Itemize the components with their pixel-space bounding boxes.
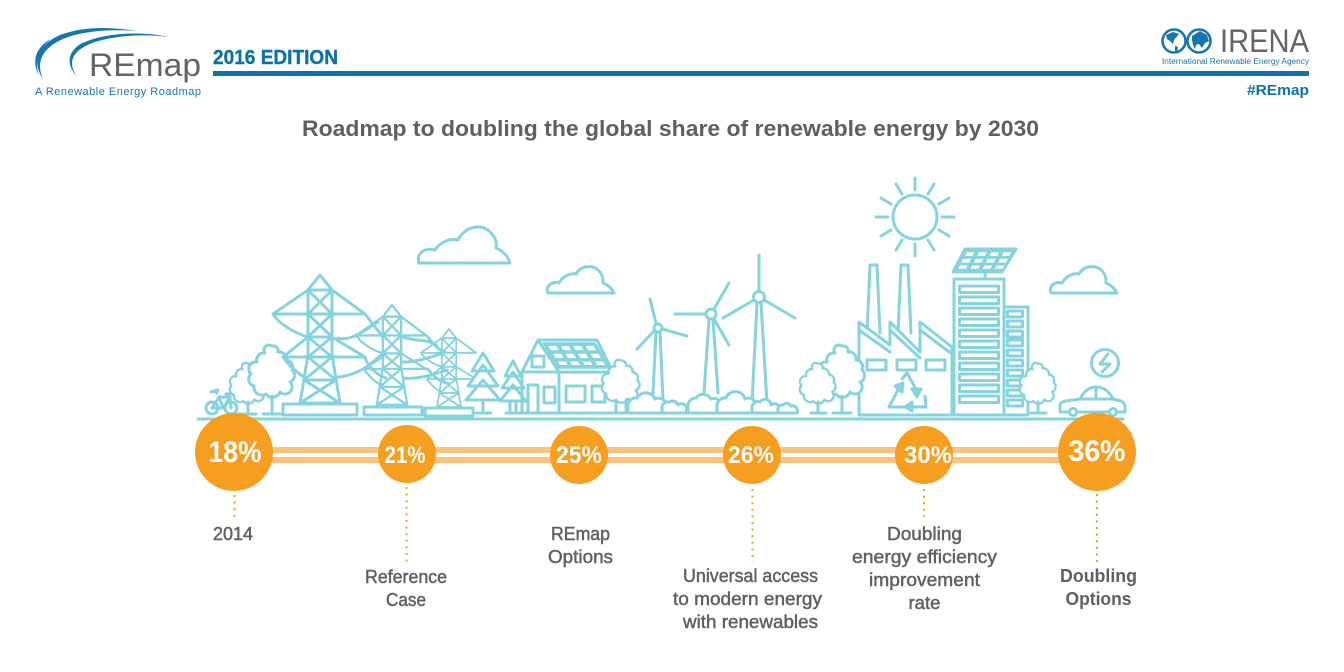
milestone: 25% REmap Options bbox=[548, 426, 613, 567]
icon: recycling triangle bbox=[889, 373, 926, 411]
milestone: 25% REmap Options: 25% bbox=[556, 442, 602, 469]
electric car bbox=[1060, 387, 1125, 416]
cloud: right bbox=[1050, 267, 1117, 293]
pine tree: first bbox=[466, 353, 500, 413]
icon: sun bbox=[876, 178, 954, 256]
icon: globe infinity bbox=[1162, 30, 1210, 53]
wind turbine: medium bbox=[675, 283, 729, 393]
milestone: 25% REmap Options: REmap bbox=[551, 524, 610, 544]
cloud: over house bbox=[547, 267, 614, 293]
header rule bbox=[213, 71, 1309, 76]
header: REmap logo bbox=[35, 28, 201, 98]
milestone: 26% Universal access bbox=[673, 426, 822, 632]
logo tagline: A Renewable Energy Roadmap bbox=[35, 86, 201, 98]
milestone: 26% Universal access: with renewables bbox=[682, 612, 818, 632]
milestone: 36% Doubling Options bbox=[1058, 413, 1137, 609]
timeline bbox=[195, 413, 1137, 632]
IRENA tagline: International Renewable Energy Agency bbox=[1162, 57, 1309, 66]
logo swoosh bbox=[35, 28, 169, 79]
power lines bbox=[338, 314, 449, 384]
wind turbine: large bbox=[723, 255, 795, 403]
title: Roadmap to doubling the global share of renewable energy by 2030 bbox=[302, 116, 1039, 141]
office towers with roof solar panel bbox=[953, 249, 1028, 415]
milestone: 30% Doubling energy efficiency: energy efficiency bbox=[852, 547, 997, 567]
wind turbine: small bbox=[637, 299, 687, 400]
bushes bbox=[628, 392, 798, 413]
milestone: 26% Universal access: Universal access bbox=[683, 566, 818, 586]
chimneys bbox=[867, 265, 911, 333]
IRENA wordmark: IRENA bbox=[1220, 23, 1310, 59]
ground line bbox=[198, 418, 1123, 420]
window rows bbox=[960, 286, 1022, 406]
edition heading: 2016 EDITION bbox=[213, 47, 338, 69]
cloud: large bbox=[418, 227, 510, 263]
trees: left pair bbox=[230, 345, 295, 414]
factory bbox=[859, 265, 952, 415]
transmission tower: large bbox=[273, 275, 365, 415]
transmission tower: small bbox=[421, 329, 476, 416]
milestone: 18% 2014: 18% bbox=[208, 436, 262, 469]
solar panel on roof bbox=[543, 343, 610, 368]
milestone: 26% Universal access: 26% bbox=[728, 442, 774, 469]
tree: by house bbox=[602, 360, 640, 413]
milestone: 30% Doubling energy efficiency: 30% bbox=[904, 442, 952, 469]
timeline double line bbox=[234, 447, 1097, 463]
milestone: 36% Doubling Options: Doubling bbox=[1060, 566, 1137, 586]
header: IRENA logo bbox=[1162, 23, 1310, 66]
milestone: 21% Reference Case: 21% bbox=[384, 442, 426, 469]
tree: by office bbox=[1020, 363, 1056, 413]
milestone: 30% Doubling energy efficiency: rate bbox=[908, 593, 940, 613]
milestone: 21% Reference Case bbox=[365, 425, 447, 610]
milestone: 36% Doubling Options: Options bbox=[1066, 589, 1132, 609]
milestone: 30% Doubling energy efficiency: improvement bbox=[869, 570, 980, 590]
milestone: 21% Reference Case: Reference bbox=[365, 567, 447, 587]
icon: electric charge bbox=[1092, 350, 1118, 376]
milestone: 18% 2014: 2014 bbox=[213, 524, 253, 544]
milestone: 30% Doubling energy efficiency: Doubling bbox=[887, 524, 962, 544]
illustration: renewable energy landscape bbox=[198, 178, 1125, 419]
logo wordmark: REmap bbox=[89, 47, 201, 83]
solar panel on roof bbox=[953, 249, 1016, 279]
pine tree: second bbox=[500, 361, 526, 413]
transmission tower: medium bbox=[356, 305, 426, 415]
milestone: 30% Doubling energy efficiency bbox=[852, 426, 997, 613]
milestone: 36% Doubling Options: 36% bbox=[1068, 435, 1126, 468]
house with rooftop solar panel bbox=[507, 340, 632, 413]
milestone: 25% REmap Options: Options bbox=[548, 547, 613, 567]
milestone: 26% Universal access: to modern energy bbox=[673, 589, 822, 609]
milestone: 21% Reference Case: Case bbox=[386, 590, 426, 610]
icon: bicycle bbox=[206, 390, 237, 414]
trees: by factory bbox=[800, 345, 865, 413]
milestone: 18% 2014 bbox=[195, 413, 273, 544]
hashtag: #REmap bbox=[1247, 82, 1309, 99]
